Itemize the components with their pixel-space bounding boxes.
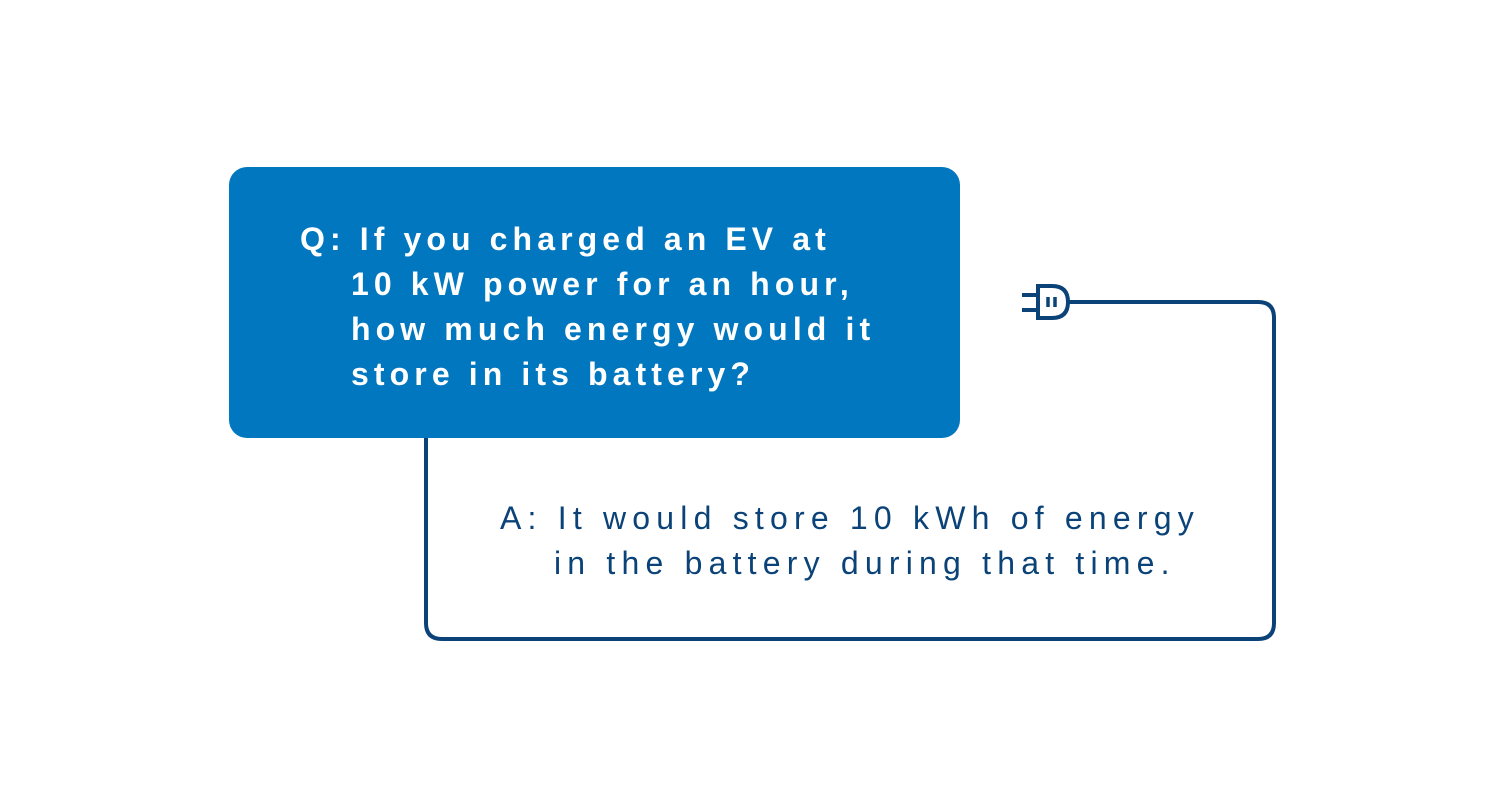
question text: how much energy would it [351, 311, 875, 347]
cord outline [426, 302, 1274, 639]
icon: plug [1022, 286, 1068, 318]
question text: 10 kW power for an hour, [351, 266, 854, 302]
answer text: in the battery during that time. [554, 545, 1176, 581]
question text [300, 221, 875, 392]
question box [229, 167, 960, 438]
answer text: A: It would store 10 kWh of energy [500, 500, 1200, 536]
answer text [500, 500, 1200, 581]
question text: Q: If you charged an EV at [300, 221, 831, 257]
question text: store in its battery? [351, 356, 755, 392]
